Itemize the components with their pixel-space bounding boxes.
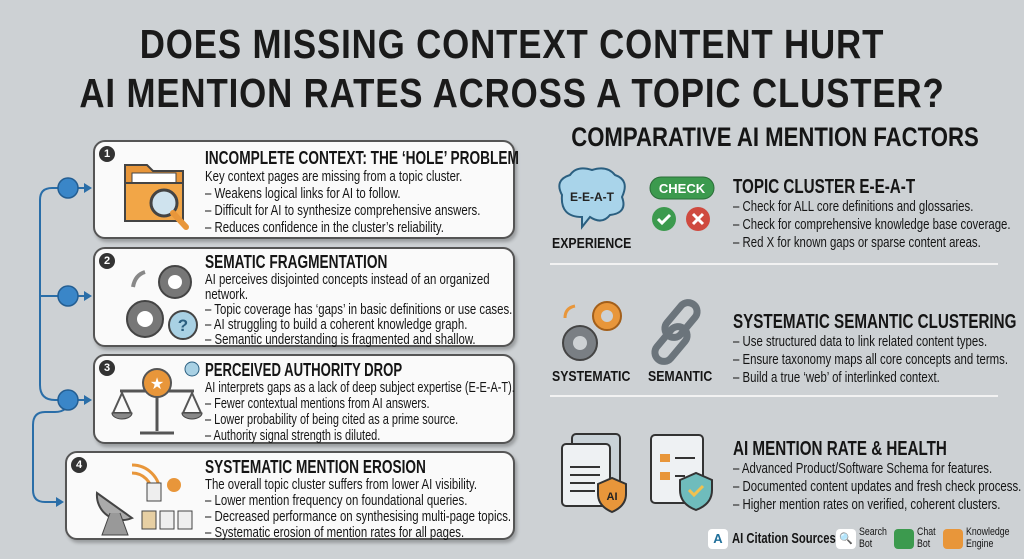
icon: satellite dish with documents (96, 464, 192, 536)
legend: AI citation sources: AI Citation Sources (732, 530, 836, 547)
title: DOES MISSING CONTEXT CONTENT HURT (140, 21, 884, 67)
card 3 (93, 354, 515, 444)
icon: gears with question (126, 265, 198, 340)
section: topic cluster E-E-A-T: – Check for comprehensive knowledge base coverage. (733, 216, 1011, 233)
section: topic cluster E-E-A-T: – Red X for known gaps or sparse content areas. (733, 234, 981, 251)
text block 3: – Authority signal strength is diluted. (205, 427, 380, 444)
section: topic cluster E-E-A-T (733, 176, 1011, 251)
text block 1: – Difficult for AI to synthesize comprehensive answers. (205, 202, 480, 219)
text block 2: AI perceives disjointed concepts instead of an organized (205, 271, 490, 288)
text block 2 (205, 252, 512, 348)
text: SYSTEMATIC (552, 368, 630, 385)
text block 1: INCOMPLETE CONTEXT: THE ‘HOLE’ PROBLEM (205, 148, 519, 168)
section: systematic semantic clustering: – Build a true ‘web’ of interlinked context. (733, 369, 940, 386)
connector lines (32, 177, 92, 507)
card 4: 4 (76, 459, 82, 471)
text block 1: Key context pages are missing from a topic cluster. (205, 168, 462, 185)
card 4 (65, 451, 515, 540)
title (79, 21, 945, 116)
icon: chain link (652, 299, 700, 365)
section: systematic semantic clustering: SYSTEMATIC SEMANTIC CLUSTERING (733, 311, 1016, 333)
text block 3: AI interprets gaps as a lack of deep subject expertise (E-E-A-T). (205, 379, 515, 396)
text block 2: – Topic coverage has ‘gaps’ in basic definitions or use cases. (205, 301, 512, 318)
icon: check badges: CHECK (659, 181, 706, 196)
text block 2: – Semantic understanding is fragmented and shallow. (205, 331, 476, 348)
text block 1 (205, 148, 519, 236)
text block 4: – Lower mention frequency on foundational queries. (205, 492, 467, 509)
icon: documents AI shield (561, 433, 627, 514)
text block 3: – Lower probability of being cited as a prime source. (205, 411, 458, 428)
icon: brain E-E-A-T: E-E-A-T (570, 190, 615, 204)
icon: brain E-E-A-T (558, 167, 626, 230)
section: AI mention rate & health: – Higher mention rates on verified, coherent clusters. (733, 496, 1000, 513)
section: AI mention rate & health: – Documented content updates and fresh check process. (733, 478, 1021, 495)
legend: AI citation sources: Chat (917, 526, 936, 538)
legend: AI citation sources: A (713, 531, 723, 546)
right heading: COMPARATIVE AI MENTION FACTORS (571, 122, 979, 152)
legend: AI citation sources: Knowledge (966, 526, 1010, 538)
text block 1: – Weakens logical links for AI to follow. (205, 185, 401, 202)
section: AI mention rate & health (733, 438, 1021, 513)
section: AI mention rate & health: – Advanced Product/Software Schema for features. (733, 460, 992, 477)
legend: AI citation sources: Bot (859, 538, 872, 550)
text block 4: – Systematic erosion of mention rates for all pages. (205, 524, 464, 541)
card 1: 1 (104, 148, 110, 160)
icon: scales with badge (112, 362, 202, 434)
icon: check badges (650, 176, 714, 231)
text block 2: SEMATIC FRAGMENTATION (205, 252, 387, 272)
text block 1: – Reduces confidence in the cluster’s reliability. (205, 219, 444, 236)
section: systematic semantic clustering: – Ensure taxonomy maps all core concepts and terms. (733, 351, 1008, 368)
text block 3: PERCEIVED AUTHORITY DROP (205, 360, 402, 380)
card 3: 3 (104, 362, 110, 374)
legend: AI citation sources: 🔍 (839, 533, 853, 545)
text block 4: – Decreased performance on synthesising multi-page topics. (205, 508, 511, 525)
text block 4: SYSTEMATIC MENTION EROSION (205, 457, 426, 477)
card 2 (93, 247, 515, 347)
icon: gears with question: ? (178, 316, 188, 335)
icon: scales with badge: ★ (150, 376, 164, 393)
legend: AI citation sources: Search (859, 526, 887, 538)
text block 3: – Fewer contextual mentions from AI answers. (205, 395, 430, 412)
title: AI MENTION RATES ACROSS A TOPIC CLUSTER? (79, 70, 945, 116)
text: EXPERIENCE (552, 235, 631, 252)
text: SEMANTIC (648, 368, 712, 385)
text block 2: network. (205, 286, 248, 303)
legend: AI citation sources (708, 526, 1010, 550)
section: topic cluster E-E-A-T: – Check for ALL core definitions and glossaries. (733, 198, 973, 215)
icon: documents AI shield: AI (606, 491, 618, 503)
section: systematic semantic clustering (733, 311, 1016, 386)
card 2: 2 (104, 255, 110, 267)
legend: AI citation sources: Engine (966, 538, 993, 550)
icon: folder with magnifier (124, 164, 189, 230)
text block 4: The overall topic cluster suffers from lower AI visibility. (205, 476, 477, 493)
section: systematic semantic clustering: – Use structured data to link related content types. (733, 333, 987, 350)
icon: gears systematic (562, 301, 622, 361)
text block 4 (205, 457, 511, 541)
card 1 (93, 140, 515, 239)
icon: document check shield (650, 434, 713, 511)
text block 2: – AI struggling to build a coherent knowledge graph. (205, 316, 467, 333)
section: AI mention rate & health: AI MENTION RATE & HEALTH (733, 438, 947, 460)
legend: AI citation sources: Bot (917, 538, 930, 550)
text block 3 (205, 360, 515, 444)
section: topic cluster E-E-A-T: TOPIC CLUSTER E-E-A-T (733, 176, 915, 198)
